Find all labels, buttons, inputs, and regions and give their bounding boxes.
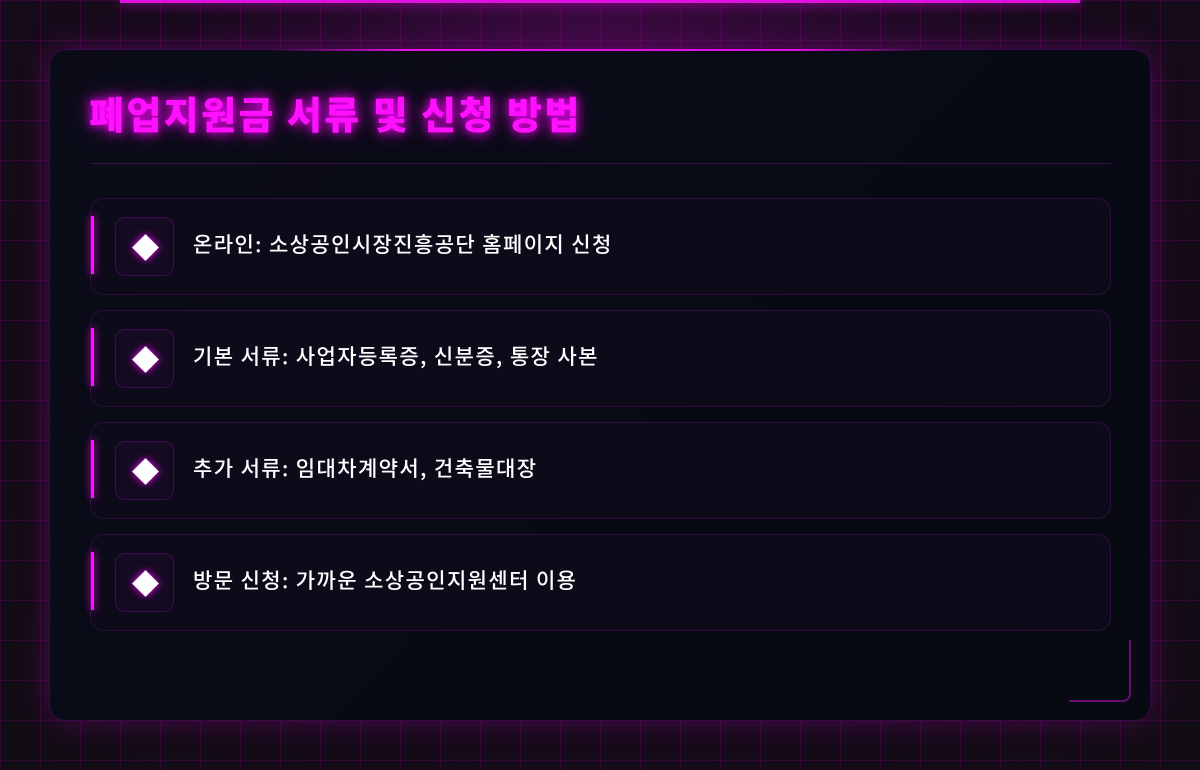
text: basic documents: 기본 서류: 사업자등록증, 신분증, 통장 사본 [193, 341, 599, 371]
title: 폐업지원금 서류 및 신청 방법 [89, 85, 582, 140]
icon: diamond [115, 441, 174, 500]
text: online: 온라인: 소상공인시장진흥공단 홈페이지 신청 [193, 229, 613, 259]
item: basic documents [90, 310, 1111, 407]
text: visit: 방문 신청: 가까운 소상공인지원센터 이용 [193, 565, 577, 595]
icon: diamond [115, 553, 174, 612]
item: additional documents [90, 422, 1111, 519]
icon: diamond [115, 217, 174, 276]
icon: diamond [115, 329, 174, 388]
item: visit [90, 534, 1111, 631]
item: online [90, 198, 1111, 295]
text: additional documents: 추가 서류: 임대차계약서, 건축물대장 [193, 453, 538, 483]
